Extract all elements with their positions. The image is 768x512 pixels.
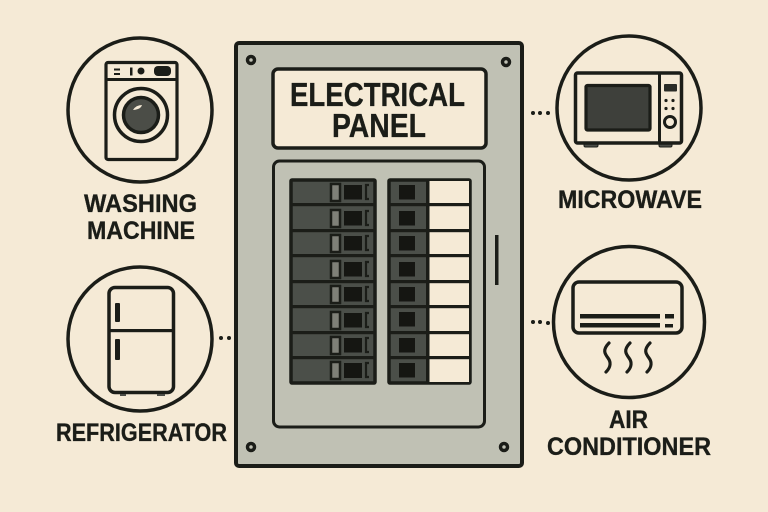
panel: electrical panel enclosure [236,43,522,466]
title: ELECTRICAL: ELECTRICAL [290,76,465,113]
icon: bottom left screw [248,444,254,450]
icon: bottom right screw [500,444,508,450]
panel: left breaker column [291,180,375,383]
label: washing machine: WASHING [84,190,197,218]
icon: air conditioner [554,246,704,398]
panel: refrigerator [56,267,231,447]
label: microwave: MICROWAVE [558,186,702,214]
title: PANEL: PANEL [332,107,426,144]
panel: inner door [274,161,484,427]
icon: washing machine [68,38,212,182]
panel: air conditioner [531,246,711,461]
label: washing machine: MACHINE [87,217,195,245]
panel: washing machine [68,38,212,245]
label: refrigerator: REFRIGERATOR [56,419,227,447]
connector dots [531,320,550,325]
connector dots [219,336,231,340]
panel: microwave [531,36,702,214]
icon: top right screw [502,58,510,66]
label: air conditioner [547,406,711,461]
label: air conditioner: AIR [609,406,648,434]
label: air conditioner: CONDITIONER [547,433,711,461]
icon: refrigerator [68,267,212,411]
icon: door handle [495,235,498,285]
icon: microwave [557,36,701,180]
panel: right breaker column [389,180,470,383]
label: washing machine [84,190,197,245]
connector dots [531,111,550,115]
icon: top left screw [248,56,254,64]
title plate [273,69,486,148]
